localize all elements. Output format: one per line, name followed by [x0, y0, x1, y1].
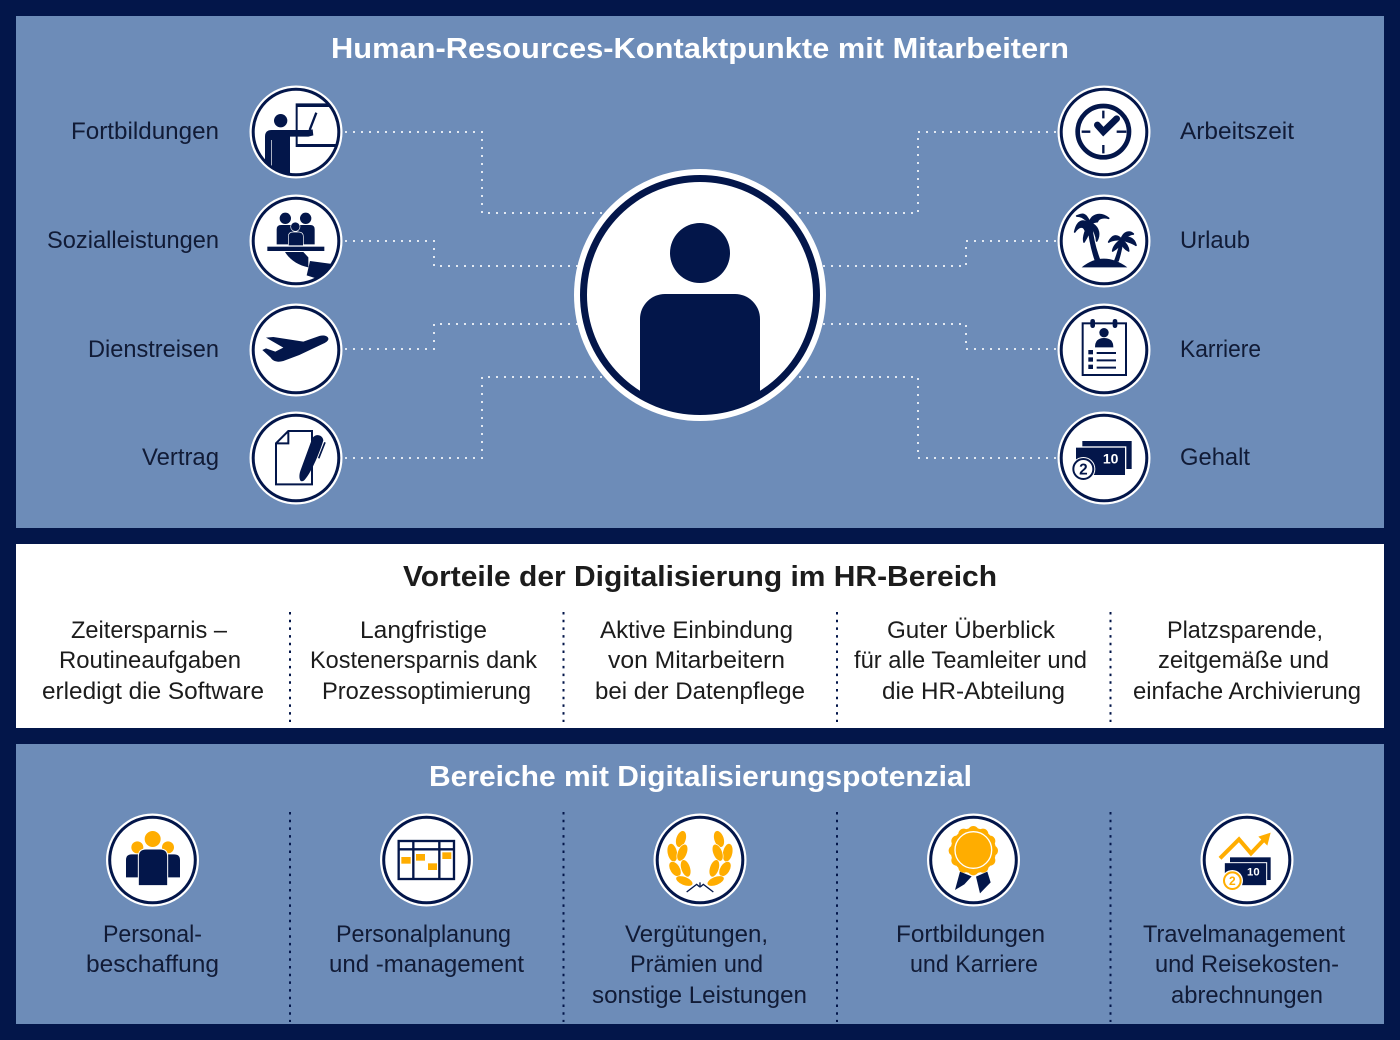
- benefit: archiving: zeitgemäße und: [1158, 647, 1329, 674]
- icon: salary money: [1058, 412, 1150, 504]
- icon: central employee: [574, 169, 826, 430]
- icon: travel expenses: [1200, 814, 1294, 906]
- icon: salary money: 10: [1103, 451, 1119, 467]
- icon: salary money: 2: [1079, 461, 1088, 478]
- icon: airplane: [250, 304, 342, 396]
- column dividers: [290, 812, 1110, 1022]
- label: Fortbildungen: Fortbildungen: [71, 118, 219, 145]
- benefit: time saving: Routineaufgaben: [59, 647, 241, 674]
- dotted connectors: [345, 132, 1056, 458]
- icon: laurel wreath: [654, 814, 746, 906]
- icon: working time clock: [1058, 86, 1150, 178]
- panel: HR touchpoints: [16, 16, 1384, 528]
- heading: potential: Bereiche mit Digitalisierungspotenzial: [429, 761, 972, 793]
- label: Vertrag: Vertrag: [142, 444, 219, 471]
- benefit: time saving: erledigt die Software: [42, 678, 264, 705]
- icon: travel expenses: 2: [1229, 874, 1236, 888]
- benefit: overview: für alle Teamleiter und: [854, 647, 1087, 674]
- icon: training presenter: [250, 86, 342, 180]
- label: Arbeitszeit: Arbeitszeit: [1180, 118, 1294, 145]
- heading: touchpoints: Human-Resources-Kontaktpunkte mit Mitarbeitern: [331, 33, 1069, 65]
- icon: career clipboard: [1058, 304, 1150, 396]
- label: Urlaub: Urlaub: [1180, 227, 1250, 254]
- benefit: time saving: Zeitersparnis –: [71, 617, 228, 644]
- panel: areas with digitalisation potential: [16, 744, 1384, 1024]
- label: Karriere: Karriere: [1180, 336, 1261, 363]
- icon: travel expenses: 10: [1247, 866, 1260, 878]
- label: Dienstreisen: Dienstreisen: [88, 336, 219, 363]
- icon: award rosette: [927, 814, 1020, 906]
- icon: recruiting people: [106, 814, 199, 906]
- benefit: archiving: [1133, 617, 1361, 705]
- area: workforce planning: und -management: [329, 951, 524, 978]
- benefit: archiving: einfache Archivierung: [1133, 678, 1361, 705]
- benefit: overview: die HR-Abteilung: [882, 678, 1065, 705]
- area: training and career: und Karriere: [910, 951, 1038, 978]
- benefit: archiving: Platzsparende,: [1167, 617, 1323, 644]
- area: recruiting: beschaffung: [86, 951, 219, 978]
- icon: holiday palms: [1058, 194, 1150, 288]
- icon: planning calendar: [380, 814, 473, 906]
- area: recruiting: Personal-: [103, 921, 202, 948]
- icon: social benefits: [250, 194, 342, 288]
- heading: benefits: Vorteile der Digitalisierung im HR-Bereich: [403, 561, 997, 593]
- benefit: overview: [854, 617, 1087, 705]
- benefit: employee involvement: bei der Datenpflege: [595, 678, 805, 705]
- area: training and career: Fortbildungen: [896, 921, 1045, 948]
- benefit: cost saving: [310, 617, 538, 705]
- area: compensation: Prämien und: [630, 951, 763, 978]
- benefit: cost saving: Langfristige: [360, 617, 487, 644]
- area: travel management: und Reisekosten-: [1155, 951, 1339, 978]
- area: workforce planning: [329, 921, 524, 978]
- area: training and career: [896, 921, 1045, 978]
- benefit: employee involvement: [595, 617, 805, 705]
- label: Sozialleistungen: Sozialleistungen: [47, 227, 219, 254]
- label: Gehalt: Gehalt: [1180, 444, 1250, 471]
- area: travel management: [1143, 921, 1345, 1009]
- area: recruiting: [86, 921, 219, 978]
- area: compensation: Vergütungen,: [625, 921, 768, 948]
- benefit: cost saving: Kostenersparnis dank: [310, 647, 538, 674]
- area: compensation: [592, 921, 807, 1009]
- area: workforce planning: Personalplanung: [336, 921, 511, 948]
- area: compensation: sonstige Leistungen: [592, 982, 807, 1009]
- benefit: overview: Guter Überblick: [887, 617, 1056, 644]
- benefit: employee involvement: von Mitarbeitern: [608, 647, 785, 674]
- panel: benefits of digitalisation: [16, 544, 1384, 728]
- benefit: time saving: [42, 617, 264, 705]
- benefit: cost saving: Prozessoptimierung: [322, 678, 531, 705]
- icon: contract: [250, 412, 342, 504]
- column dividers: [290, 612, 1110, 722]
- area: travel management: abrechnungen: [1171, 982, 1323, 1009]
- benefit: employee involvement: Aktive Einbindung: [600, 617, 793, 644]
- area: travel management: Travelmanagement: [1143, 921, 1345, 948]
